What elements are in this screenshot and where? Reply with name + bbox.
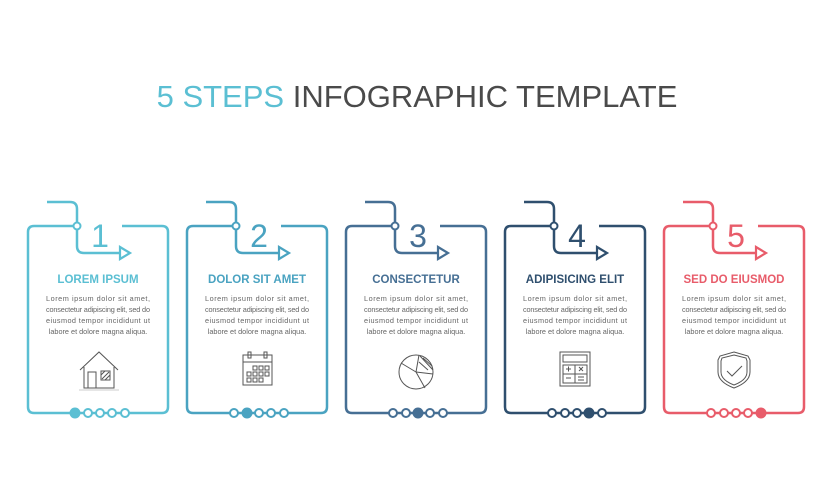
icon: calendar <box>243 352 272 385</box>
panel: step 3: labore et dolore magna aliqua. <box>367 327 465 336</box>
icon: pie chart <box>399 355 433 389</box>
panel: step 2: DOLOR SIT AMET <box>208 274 306 286</box>
icon: calculator <box>560 352 590 386</box>
panel: step 4 <box>505 202 645 418</box>
panel: step 2: labore et dolore magna aliqua. <box>208 327 306 336</box>
panel: step 1: labore et dolore magna aliqua. <box>49 327 147 336</box>
panel: step 3: 3 <box>409 218 427 254</box>
panel: step 5: consectetur adipiscing elit, sed do <box>682 305 786 314</box>
panel: step 4: Lorem ipsum dolor sit amet, <box>523 294 627 303</box>
icon: house <box>79 352 119 390</box>
panel: step 4: 4 <box>568 218 586 254</box>
panel: step 3: Lorem ipsum dolor sit amet, <box>364 294 468 303</box>
icon: shield <box>718 352 750 388</box>
panel: step 4: labore et dolore magna aliqua. <box>526 327 624 336</box>
panel: step 2 <box>187 202 327 418</box>
panel: step 2: consectetur adipiscing elit, sed do <box>205 305 309 314</box>
panel: step 2: Lorem ipsum dolor sit amet, <box>205 294 309 303</box>
title: 5 STEPS INFOGRAPHIC TEMPLATE <box>157 79 677 114</box>
panel: step 5: SED DO EIUSMOD <box>684 274 784 286</box>
panel: step 4: consectetur adipiscing elit, sed do <box>523 305 627 314</box>
panel: step 1: consectetur adipiscing elit, sed do <box>46 305 150 314</box>
panel: step 3: CONSECTETUR <box>372 274 460 286</box>
panel: step 1 <box>28 202 168 418</box>
panel: step 5: eiusmod tempor incididunt ut <box>682 316 786 325</box>
panel: step 5 <box>664 202 804 418</box>
panel: step 3: eiusmod tempor incididunt ut <box>364 316 468 325</box>
panel: step 3: consectetur adipiscing elit, sed do <box>364 305 468 314</box>
panel: step 5: Lorem ipsum dolor sit amet, <box>682 294 786 303</box>
panel: step 1: LOREM IPSUM <box>57 274 139 286</box>
panel: step 1: 1 <box>91 218 109 254</box>
panel: step 4: eiusmod tempor incididunt ut <box>523 316 627 325</box>
panel: step 5: labore et dolore magna aliqua. <box>685 327 783 336</box>
panel: step 5: 5 <box>727 218 745 254</box>
panel: step 1: Lorem ipsum dolor sit amet, <box>46 294 150 303</box>
panel: step 2: eiusmod tempor incididunt ut <box>205 316 309 325</box>
panel: step 1: eiusmod tempor incididunt ut <box>46 316 150 325</box>
panel: step 2: 2 <box>250 218 268 254</box>
panel: step 3 <box>346 202 486 418</box>
panel: step 4: ADIPISICING ELIT <box>526 274 624 286</box>
